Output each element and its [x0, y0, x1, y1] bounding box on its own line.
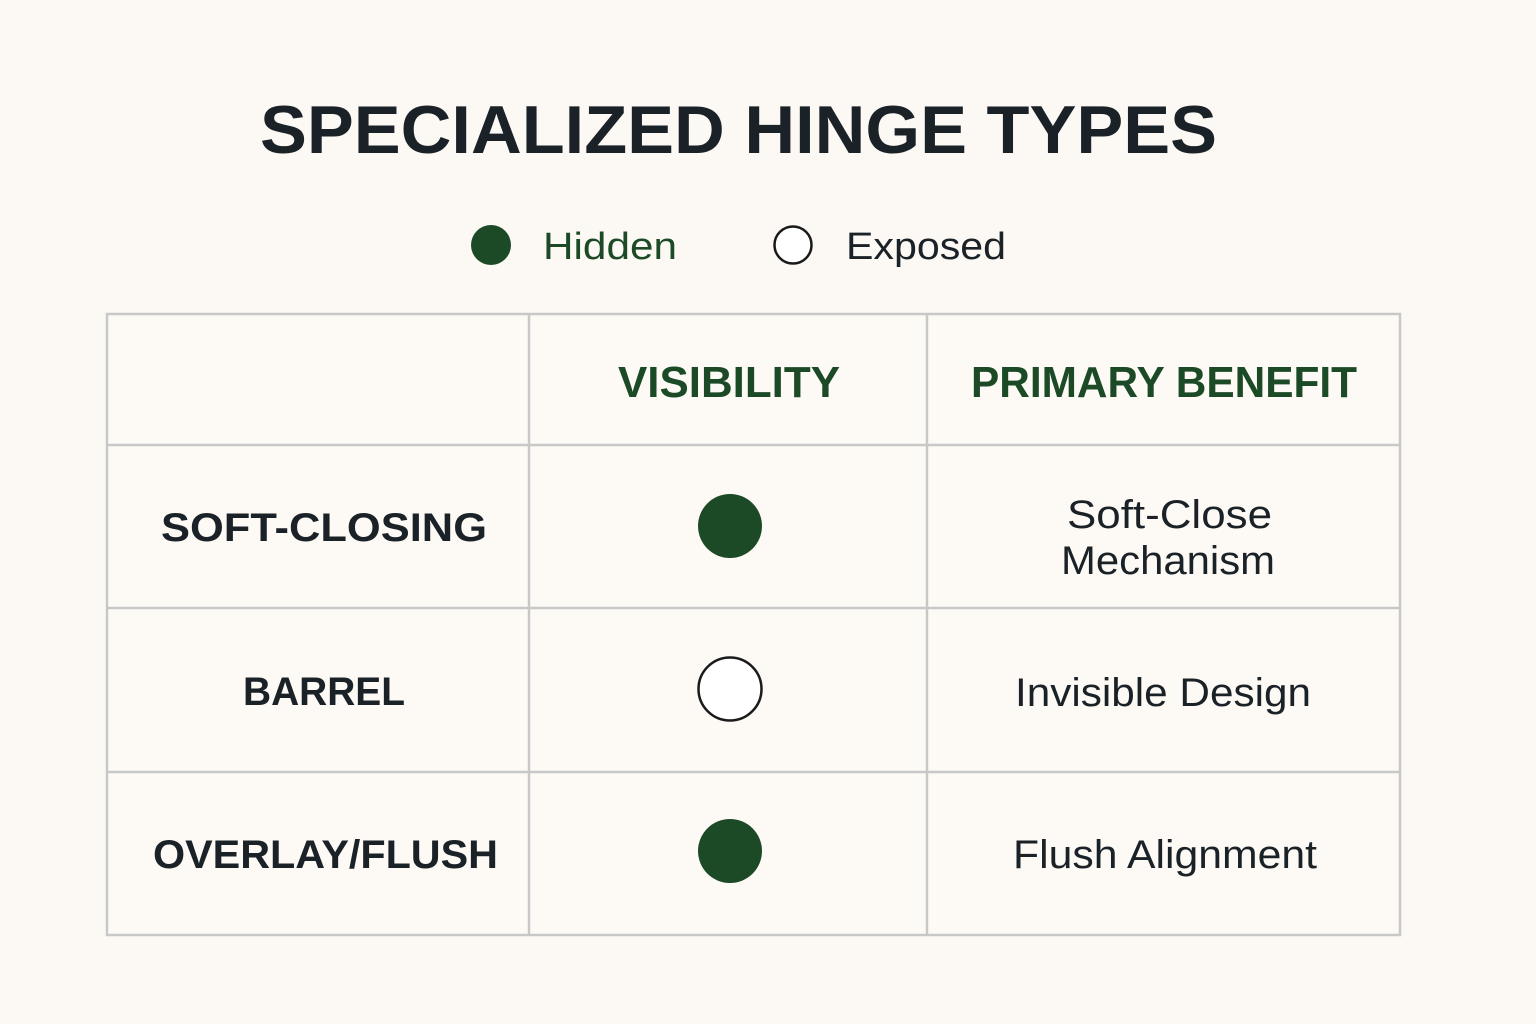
row: overlay/flush — [153, 819, 1317, 883]
legend: exposed: Exposed — [846, 226, 1006, 268]
row: soft-closing: Mechanism — [1061, 539, 1275, 583]
row: soft-closing: Soft-Close — [1067, 493, 1272, 537]
header: primary benefit: PRIMARY BENEFIT — [971, 358, 1357, 407]
table — [107, 314, 1400, 935]
row: soft-closing: SOFT-CLOSING — [161, 506, 487, 550]
legend: hidden: Hidden — [543, 226, 677, 268]
legend: exposed — [774, 226, 1006, 268]
row: barrel: Invisible Design — [1015, 671, 1311, 715]
row: overlay/flush: Flush Alignment — [1013, 833, 1317, 877]
row: soft-closing — [161, 493, 1275, 583]
row: overlay/flush: OVERLAY/FLUSH — [153, 833, 498, 877]
row: barrel — [243, 658, 1311, 720]
legend: hidden — [471, 225, 677, 268]
title: SPECIALIZED HINGE TYPES — [260, 92, 1217, 168]
row: barrel: BARREL — [243, 670, 405, 714]
header: visibility: VISIBILITY — [618, 358, 840, 407]
legend — [471, 225, 1006, 268]
